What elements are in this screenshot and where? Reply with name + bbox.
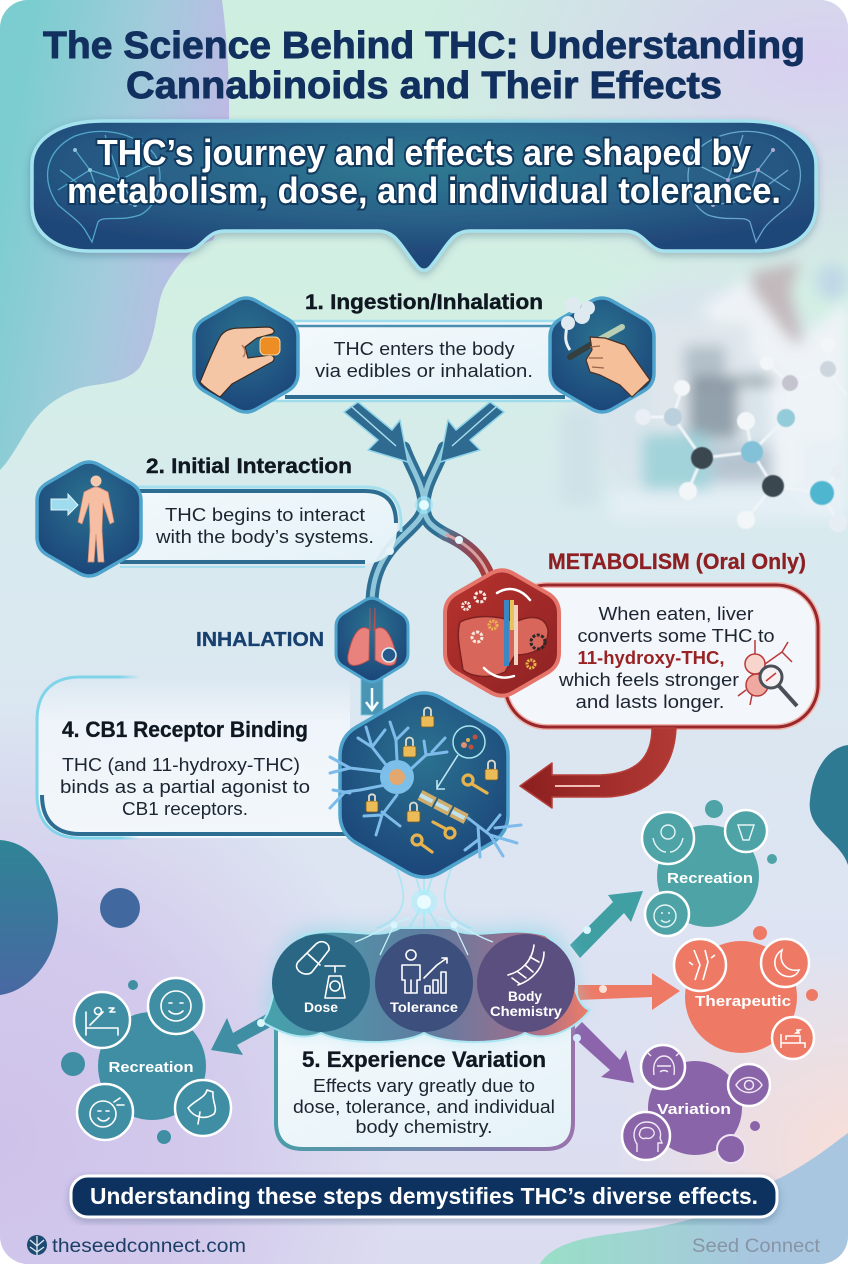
- text box: metabolism: and lasts longer.: [576, 692, 724, 712]
- text box: step 5: 5. Experience Variation: [302, 1047, 546, 1072]
- label: inhalation: INHALATION: [196, 629, 324, 651]
- factor: body chemistry: [477, 934, 575, 1032]
- factor: tolerance: Tolerance: [390, 999, 458, 1015]
- arrow: to right recreation: [570, 891, 643, 958]
- text box: metabolism: 11-hydroxy-THC,: [578, 648, 724, 668]
- icon: smiling face: [148, 978, 204, 1034]
- heading: metabolism: METABOLISM (Oral Only): [548, 549, 806, 574]
- arrow: metabolism to receptor: [520, 728, 676, 808]
- text box: step 1: THC enters the body: [334, 339, 514, 359]
- icon: reclining figure: [175, 1080, 231, 1136]
- text box: metabolism: converts some THC to: [578, 626, 774, 646]
- panel: step 4 CB1 receptor binding: [37, 677, 521, 877]
- text box: metabolism: [505, 585, 818, 727]
- factor: body chemistry: Body: [508, 988, 542, 1004]
- factor cluster: dose, tolerance, body chemistry: [257, 918, 607, 1042]
- icon: hand holding edible: [194, 298, 298, 412]
- outcome cluster: right recreation: [642, 800, 777, 936]
- label: recreation: Recreation: [667, 870, 753, 887]
- title: Cannabinoids and Their Effects: [126, 65, 722, 107]
- panel: step 1 ingestion/inhalation: [194, 291, 654, 412]
- icon: neuron with locks and keys: [330, 693, 521, 877]
- factor: body chemistry: Chemistry: [490, 1003, 562, 1019]
- text box: step 5: body chemistry.: [356, 1117, 492, 1137]
- icon: bed: [772, 1017, 814, 1059]
- heading: step 1: 1. Ingestion/Inhalation: [305, 291, 543, 314]
- outcome cluster: variation: [622, 1045, 770, 1163]
- text box: metabolism: When eaten, liver: [598, 604, 754, 624]
- text box: step 5: [276, 1025, 573, 1149]
- panel: step 2 initial interaction: [37, 455, 401, 576]
- icon: flower bud: [725, 810, 767, 852]
- icon: left brain: [48, 131, 160, 242]
- footer banner: [71, 1176, 777, 1217]
- brand: wordmark: Seed Connect: [692, 1236, 821, 1257]
- icon: joint pain: [674, 939, 726, 991]
- icon: human body with arrow: [37, 462, 141, 576]
- outcome cluster: therapeutic: [674, 926, 818, 1059]
- text box: step 4: binds as a partial agonist to: [60, 777, 310, 797]
- footer banner: Understanding these steps demystifies THC’s diverse effects.: [90, 1183, 758, 1209]
- text box: step 1: via edibles or inhalation.: [315, 361, 533, 381]
- text box: step 1: [270, 321, 580, 401]
- text box: step 4: THC (and 11-hydroxy-THC): [62, 755, 300, 775]
- text box: step 2: [120, 487, 401, 567]
- brand: website: theseedconnect.com: [52, 1236, 246, 1257]
- arrow: ingestion converging left: [344, 402, 408, 462]
- arrow: to variation: [570, 1022, 634, 1083]
- factor: dose: [272, 934, 370, 1032]
- text box: step 5: dose, tolerance, and individual: [293, 1097, 555, 1117]
- connecting pathways: [372, 448, 490, 604]
- label: therapeutic: Therapeutic: [695, 993, 791, 1010]
- label: recreation: Recreation: [108, 1059, 194, 1076]
- icon: hands holding: [642, 812, 694, 864]
- icon: seed logo: [27, 1235, 47, 1255]
- title: The Science Behind THC: Understanding: [43, 25, 805, 67]
- text box: step 2: THC begins to interact: [165, 505, 365, 525]
- arrow: to left recreation: [211, 1012, 276, 1055]
- text box: step 4: [37, 677, 350, 838]
- banner: key message: [32, 121, 816, 270]
- arrow: inhalation converging right: [440, 402, 504, 462]
- label: variation: Variation: [657, 1101, 731, 1118]
- icon: happy face: [645, 892, 689, 936]
- factor: tolerance: [375, 934, 473, 1032]
- icon: relaxed face: [77, 1084, 133, 1140]
- text box: step 4: 4. CB1 Receptor Binding: [62, 717, 308, 742]
- title: [43, 25, 805, 107]
- icon: eye: [728, 1064, 770, 1106]
- stem: neuron to factors: [377, 867, 471, 935]
- text box: metabolism: which feels stronger: [558, 670, 739, 690]
- icon: moon: [761, 939, 809, 987]
- banner: key message: THC’s journey and effects are shaped by: [97, 132, 751, 173]
- text box: step 4: CB1 receptors.: [122, 799, 248, 819]
- outcome cluster: left recreation: [61, 978, 231, 1144]
- text box: step 5: Effects vary greatly due to: [313, 1076, 535, 1096]
- icon: molecule with magnifier: [738, 640, 797, 706]
- arrow: to therapeutic: [578, 973, 680, 1010]
- arrow: inhalation to receptor: [361, 675, 383, 715]
- icon: lungs hexagon: [336, 598, 408, 682]
- panel: step 5 experience variation: [257, 918, 607, 1149]
- icon: right brain: [688, 131, 800, 242]
- heading: step 2: 2. Initial Interaction: [146, 455, 352, 478]
- banner: key message: metabolism, dose, and individual tolerance.: [67, 170, 781, 211]
- factor: dose: Dose: [304, 999, 338, 1015]
- icon: liver with gears: [445, 570, 559, 696]
- icon: hand holding joint with smoke: [550, 297, 654, 412]
- text box: step 2: with the body’s systems.: [155, 527, 374, 547]
- icon: head with brain: [622, 1112, 670, 1160]
- panel: metabolism oral only: [445, 549, 818, 727]
- icon: person resting in bed: [74, 992, 130, 1048]
- lab photo background: [552, 255, 848, 535]
- icon: anxious face: [641, 1045, 685, 1089]
